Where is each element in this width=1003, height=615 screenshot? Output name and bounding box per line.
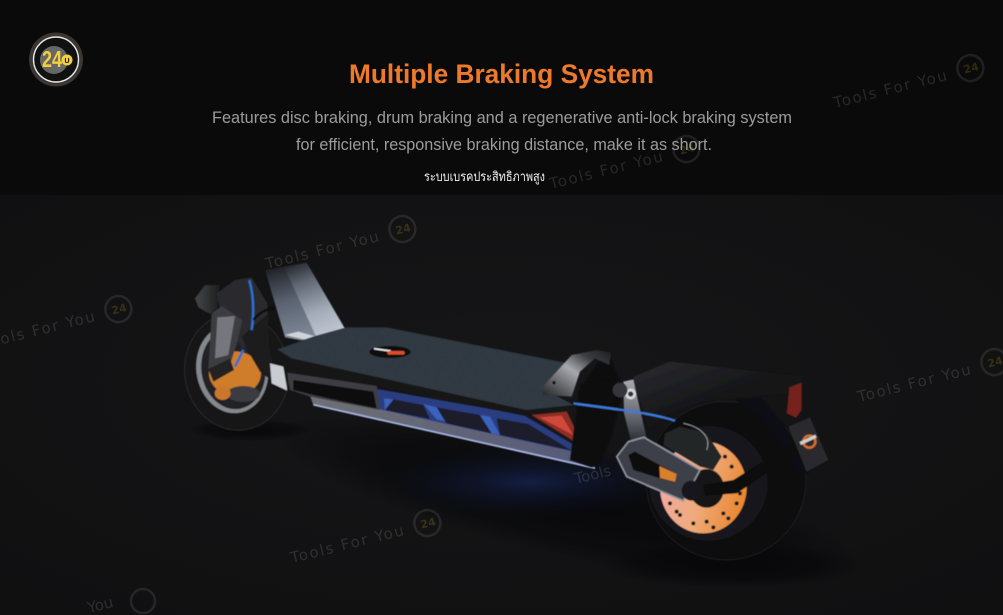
- Thai caption: ระบบเบรคประสิทธิภาพสูง: [424, 169, 545, 185]
- watermark 8: [85, 589, 155, 615]
- watermark 1: [829, 52, 986, 115]
- rear wheel assembly: [570, 358, 828, 560]
- deck and frame: [276, 327, 598, 469]
- brand logo badge: U: [64, 58, 70, 65]
- black deck edge: [276, 348, 598, 455]
- rear fender: [633, 362, 805, 428]
- watermark 2: [545, 133, 702, 196]
- stem: [265, 263, 347, 345]
- title: Multiple Braking System: [349, 59, 654, 89]
- watermark 7: 24: [419, 515, 437, 532]
- brake caliper: [663, 427, 722, 470]
- number plate: [788, 417, 828, 472]
- description text: Features disc braking, drum braking and a regenerative anti-lock braking system: [212, 108, 792, 127]
- watermark 6: Tools: [572, 461, 613, 488]
- watermark 5: Tools For You: [855, 360, 973, 406]
- deck top surface: [277, 327, 573, 410]
- watermark 1: Tools For You: [831, 66, 949, 112]
- silver lower rail: [310, 396, 595, 469]
- brand logo badge: [29, 32, 83, 86]
- watermark 2: Tools For You: [547, 147, 665, 193]
- grey side strip: [287, 370, 380, 410]
- disc rotor: [660, 441, 747, 533]
- background header band: [0, 0, 1003, 195]
- blue frame: [373, 388, 595, 467]
- watermark 3: Tools For You: [263, 227, 381, 273]
- rear axle block: [570, 358, 620, 467]
- floor glow and shadow: [188, 376, 875, 615]
- wheel strut: [703, 443, 796, 496]
- fender stay: [733, 397, 810, 473]
- bracket cutout: [628, 452, 675, 483]
- red rear reflector: [532, 412, 584, 447]
- rim: [649, 426, 768, 541]
- watermark 7: [286, 507, 443, 570]
- watermark 4: [0, 293, 134, 356]
- rear tire: [646, 401, 806, 560]
- background lower panel: [0, 195, 1003, 615]
- watermark 7: Tools For You: [288, 521, 406, 567]
- description text: for efficient, responsive braking distance, make it as short.: [296, 135, 712, 154]
- watermark 2: 24: [678, 141, 696, 158]
- swingarm upright: [623, 379, 647, 443]
- watermark 3: [261, 213, 418, 276]
- rear step guard: [543, 350, 627, 403]
- swingarm bracket: [617, 437, 700, 501]
- brand logo badge: 24: [42, 46, 62, 72]
- front wheel assembly: [177, 277, 296, 437]
- blue frame ribs: [384, 398, 500, 435]
- scooter illustration: [177, 263, 828, 560]
- watermark 5: [853, 346, 1003, 409]
- brake cable: [573, 403, 675, 421]
- black battery pocket: [293, 380, 377, 408]
- watermark 1: 24: [962, 60, 980, 77]
- tail light: [787, 382, 802, 418]
- wheel axle: [682, 481, 702, 501]
- frame pockets: [385, 399, 572, 451]
- deck logo opening: [369, 346, 411, 358]
- watermark 3: 24: [394, 221, 412, 238]
- watermark 4: 24: [110, 301, 128, 318]
- description text: [212, 108, 792, 154]
